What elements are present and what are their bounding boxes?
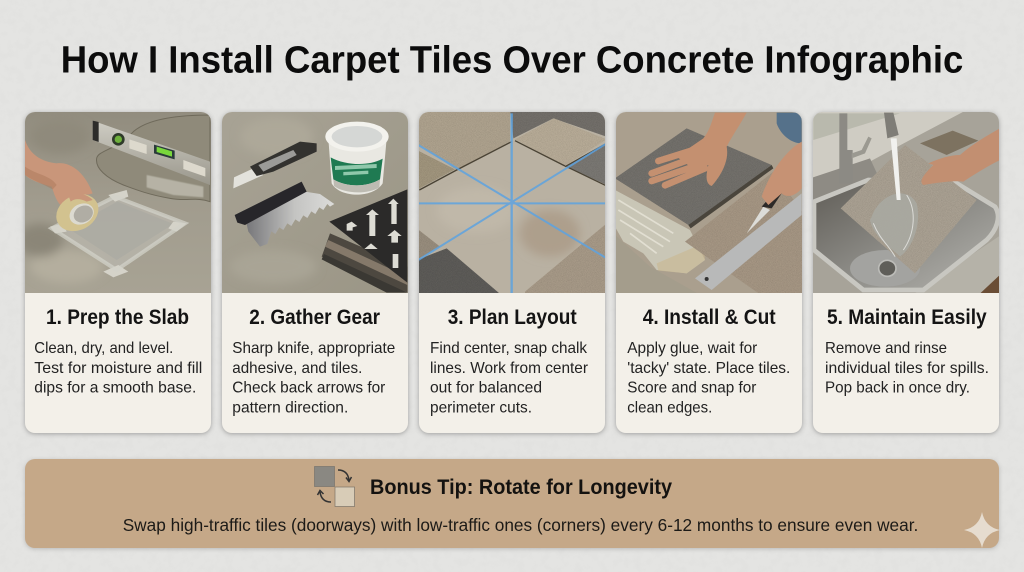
tile stack — [322, 233, 407, 293]
panel: step 1 prep the slab — [25, 112, 211, 433]
text block: Pop back in once dry. — [825, 379, 970, 396]
panel: step 4 install and cut — [616, 112, 802, 433]
ruler — [695, 193, 802, 290]
glue — [615, 190, 705, 273]
heading: 2. Gather Gear — [249, 306, 380, 329]
drain — [850, 250, 920, 287]
text block — [232, 340, 395, 416]
panel: step 3 plan layout — [419, 112, 605, 433]
text block: adhesive, and tiles. — [232, 360, 362, 376]
text block — [430, 340, 589, 416]
text block: individual tiles for spills. — [825, 360, 989, 376]
arrows on tile backs — [347, 199, 402, 249]
water stream — [891, 138, 901, 200]
heading: 1. Prep the Slab — [46, 306, 189, 329]
text block: perimeter cuts. — [430, 399, 532, 416]
image: hand pressing tile while cutting with knife and ruler — [616, 112, 802, 293]
text block — [825, 340, 989, 396]
tile — [841, 145, 977, 273]
concrete floor — [613, 233, 703, 297]
heading: 4. Install & Cut — [643, 306, 776, 329]
panel: bonus tip — [25, 459, 999, 548]
panel: step 5 maintain easily — [813, 112, 999, 433]
plastic sheet — [52, 197, 185, 270]
hand — [652, 113, 747, 186]
image: hand taping plastic sheet on concrete beside a level — [25, 112, 211, 293]
icon: rotating tiles — [314, 466, 355, 507]
text block: Test for moisture and fill — [34, 360, 202, 376]
tub — [328, 138, 387, 195]
image: rinsing a carpet tile in a steel sink — [813, 112, 999, 293]
window and wall — [810, 110, 967, 183]
trowel — [247, 192, 334, 247]
heading: 5. Maintain Easily — [827, 306, 987, 329]
jeans — [777, 113, 802, 143]
text block: Find center, snap chalk — [430, 340, 588, 356]
text block: Score and snap for — [627, 379, 757, 396]
panel: step 2 gather gear — [222, 112, 408, 433]
beige carpet strip — [685, 172, 803, 297]
text block: Clean, dry, and level. — [34, 340, 173, 356]
hand — [921, 128, 1000, 185]
text block: clean edges. — [627, 399, 712, 416]
puddle — [97, 115, 210, 202]
heading: 3. Plan Layout — [448, 306, 577, 329]
text block: Check back arrows for — [232, 379, 386, 396]
hand — [25, 140, 93, 207]
text block: out for balanced — [430, 379, 542, 396]
knife and second hand — [747, 207, 770, 233]
icon: sparkle — [964, 512, 1000, 548]
water on tile — [870, 193, 918, 257]
title: How I Install Carpet Tiles Over Concrete Infographic — [61, 39, 963, 81]
tape roll — [50, 187, 105, 238]
text block: Sharp knife, appropriate — [232, 340, 395, 356]
text block — [627, 340, 790, 416]
text block: pattern direction. — [232, 399, 348, 416]
faucet — [839, 113, 853, 183]
image: chalk lines on concrete with tiles around — [419, 112, 605, 293]
text block: 'tacky' state. Place tiles. — [627, 360, 790, 376]
sink basin with rim — [814, 180, 998, 290]
tiles — [417, 110, 607, 297]
lower counter — [910, 233, 1003, 297]
blue chalk lines — [417, 113, 607, 293]
level — [93, 121, 210, 185]
text block: Remove and rinse — [825, 340, 947, 356]
text block: dips for a smooth base. — [34, 379, 196, 396]
grey tile — [615, 128, 772, 226]
heading: Bonus Tip: Rotate for Longevity — [370, 476, 672, 499]
text block: lines. Work from center — [430, 360, 589, 376]
text block: Apply glue, wait for — [627, 340, 758, 356]
knife — [233, 168, 263, 188]
text block: Swap high-traffic tiles (doorways) with low-traffic ones (corners) every 6-12 months to ensure even wear. — [123, 515, 918, 535]
image: knife, adhesive tub, trowel and tile stack — [222, 112, 408, 293]
text block — [34, 340, 202, 396]
concrete gaps — [419, 141, 607, 190]
